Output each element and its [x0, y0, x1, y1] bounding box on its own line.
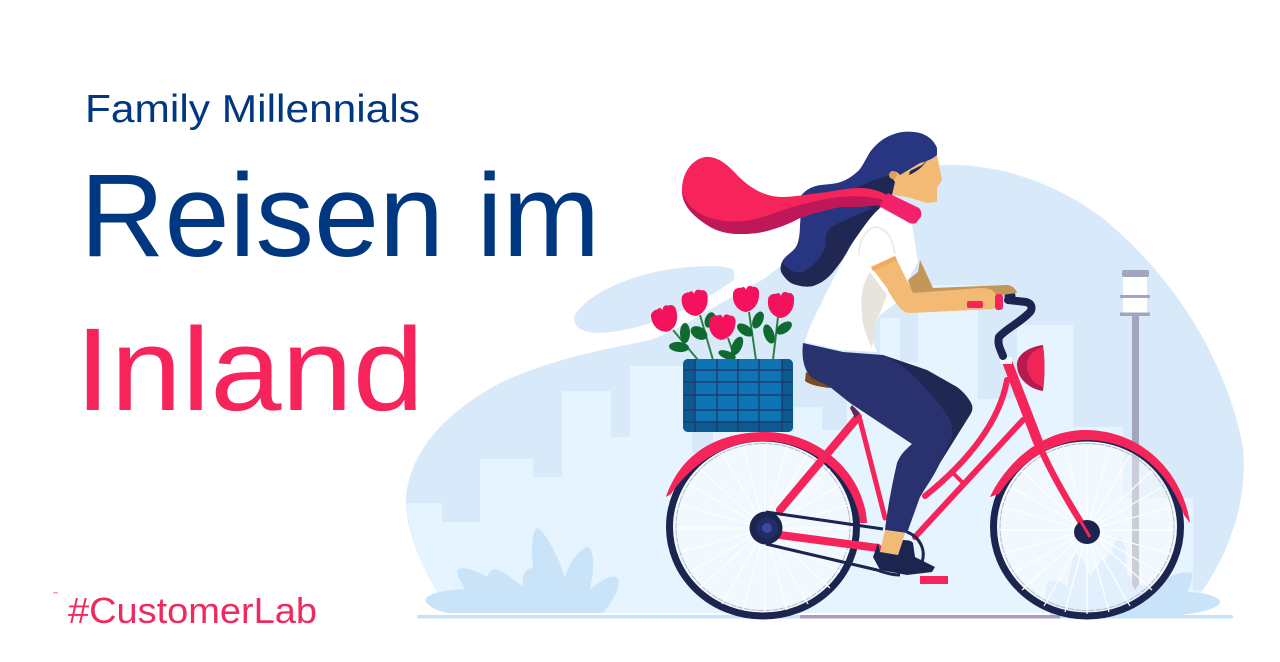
grips — [967, 301, 983, 308]
back arm — [908, 260, 1017, 296]
ear — [889, 171, 897, 179]
city skyline — [406, 285, 1203, 613]
front arm — [871, 256, 997, 313]
torso — [805, 208, 918, 352]
hair — [781, 132, 937, 287]
scarf — [682, 157, 887, 234]
street lamp — [1120, 270, 1150, 590]
pedal — [920, 576, 948, 584]
subtitle: Family Millennials — [85, 88, 420, 131]
title line 2: Inland — [75, 304, 424, 436]
hashtag: #CustomerLab — [68, 590, 317, 631]
basket with flowers — [649, 286, 794, 432]
saddle — [805, 372, 832, 388]
title line 1: Reisen im — [80, 150, 600, 282]
woman riding — [682, 132, 1017, 575]
background blob — [406, 165, 1244, 613]
rear fender — [666, 432, 867, 523]
front lamp — [1017, 345, 1044, 391]
pants — [883, 355, 972, 497]
bicycle frame — [780, 364, 1087, 548]
front hub — [1074, 520, 1100, 544]
rear wheel — [670, 438, 856, 616]
ground line — [417, 615, 1233, 618]
face — [890, 155, 942, 203]
shoe — [873, 540, 935, 575]
bush left — [425, 528, 619, 613]
front wheel — [994, 438, 1180, 616]
chain and rear hub — [750, 512, 923, 575]
bush right — [1045, 537, 1220, 615]
ankle — [880, 530, 905, 555]
front fender — [990, 430, 1190, 523]
small mark — [53, 592, 58, 594]
handlebar — [998, 290, 1032, 364]
hair strand — [909, 160, 927, 175]
